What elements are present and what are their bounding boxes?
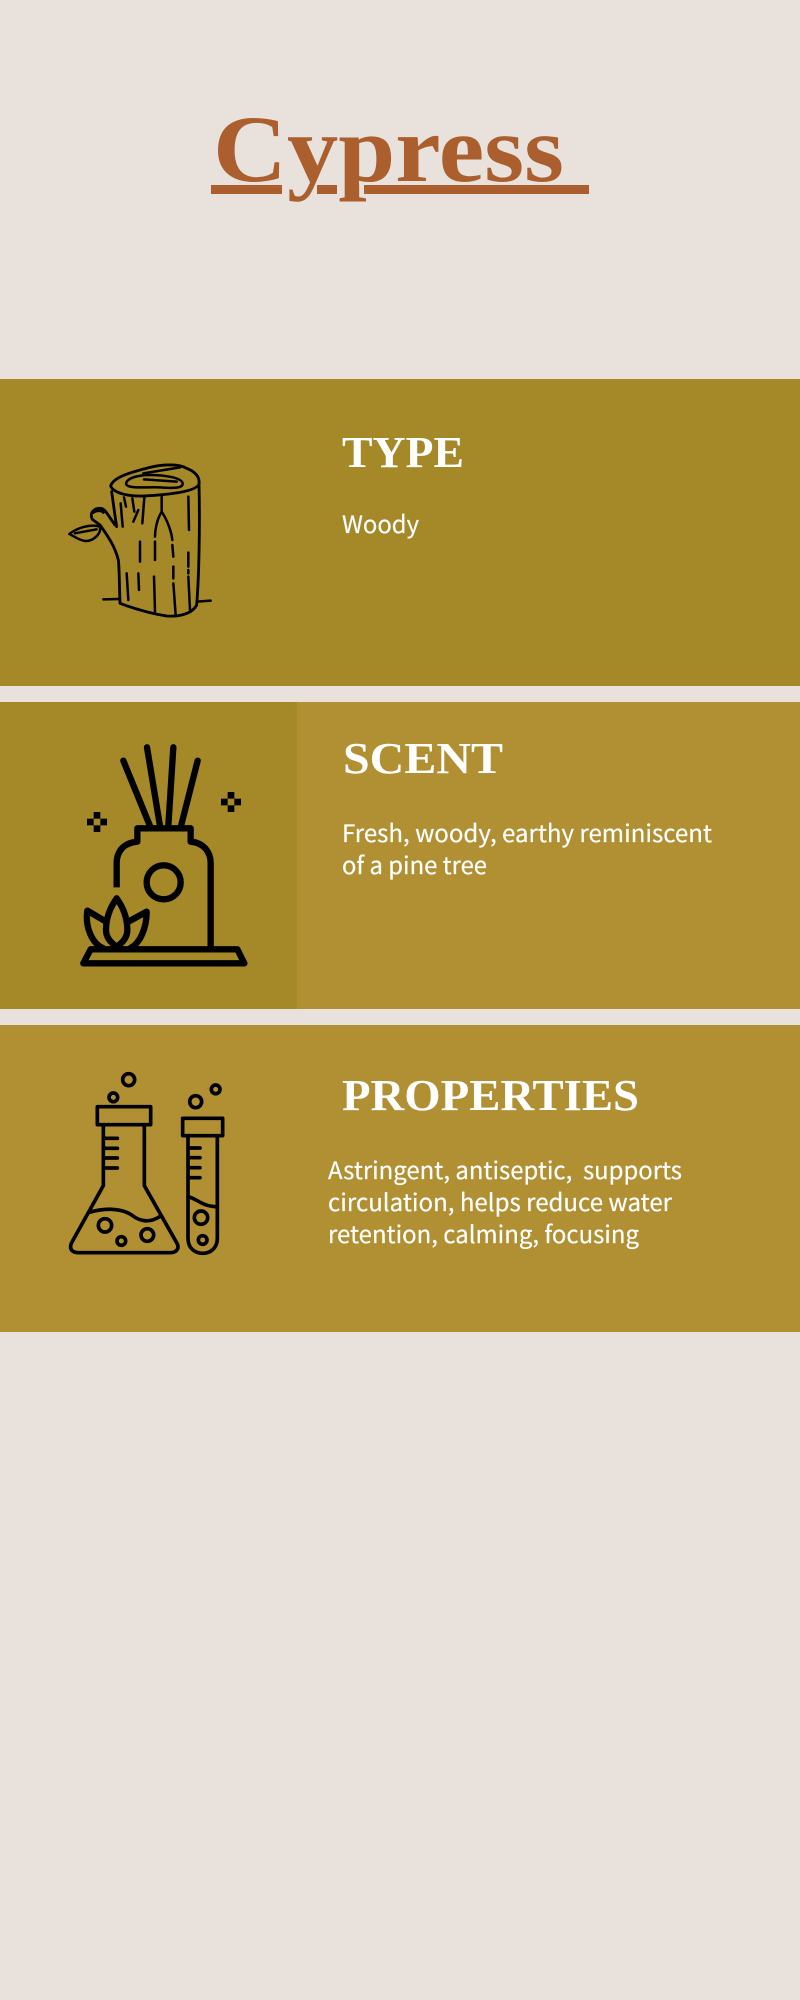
heading: properties: PROPERTIES (342, 1071, 639, 1120)
text: scent description (342, 814, 712, 881)
icon: reed diffuser (83, 747, 244, 963)
text: properties description (328, 1151, 682, 1250)
icon: lab flask and test tube (71, 1074, 223, 1253)
text: properties description: Astringent, antiseptic, supports (328, 1151, 682, 1186)
text: scent description: of a pine tree (342, 846, 487, 881)
panel: scent (0, 702, 800, 1009)
text: type description: Woody (342, 505, 419, 540)
heading: type: TYPE (342, 428, 464, 477)
title: Cypress: Cypress (213, 96, 564, 202)
text: properties description: retention, calming, focusing (328, 1215, 639, 1250)
text: scent description: Fresh, woody, earthy reminiscent (342, 814, 712, 849)
panel: properties (0, 1025, 800, 1332)
heading: scent: SCENT (343, 734, 503, 783)
panel: type (0, 379, 800, 686)
text: properties description: circulation, helps reduce water (328, 1183, 673, 1218)
icon: tree stump (69, 465, 211, 616)
